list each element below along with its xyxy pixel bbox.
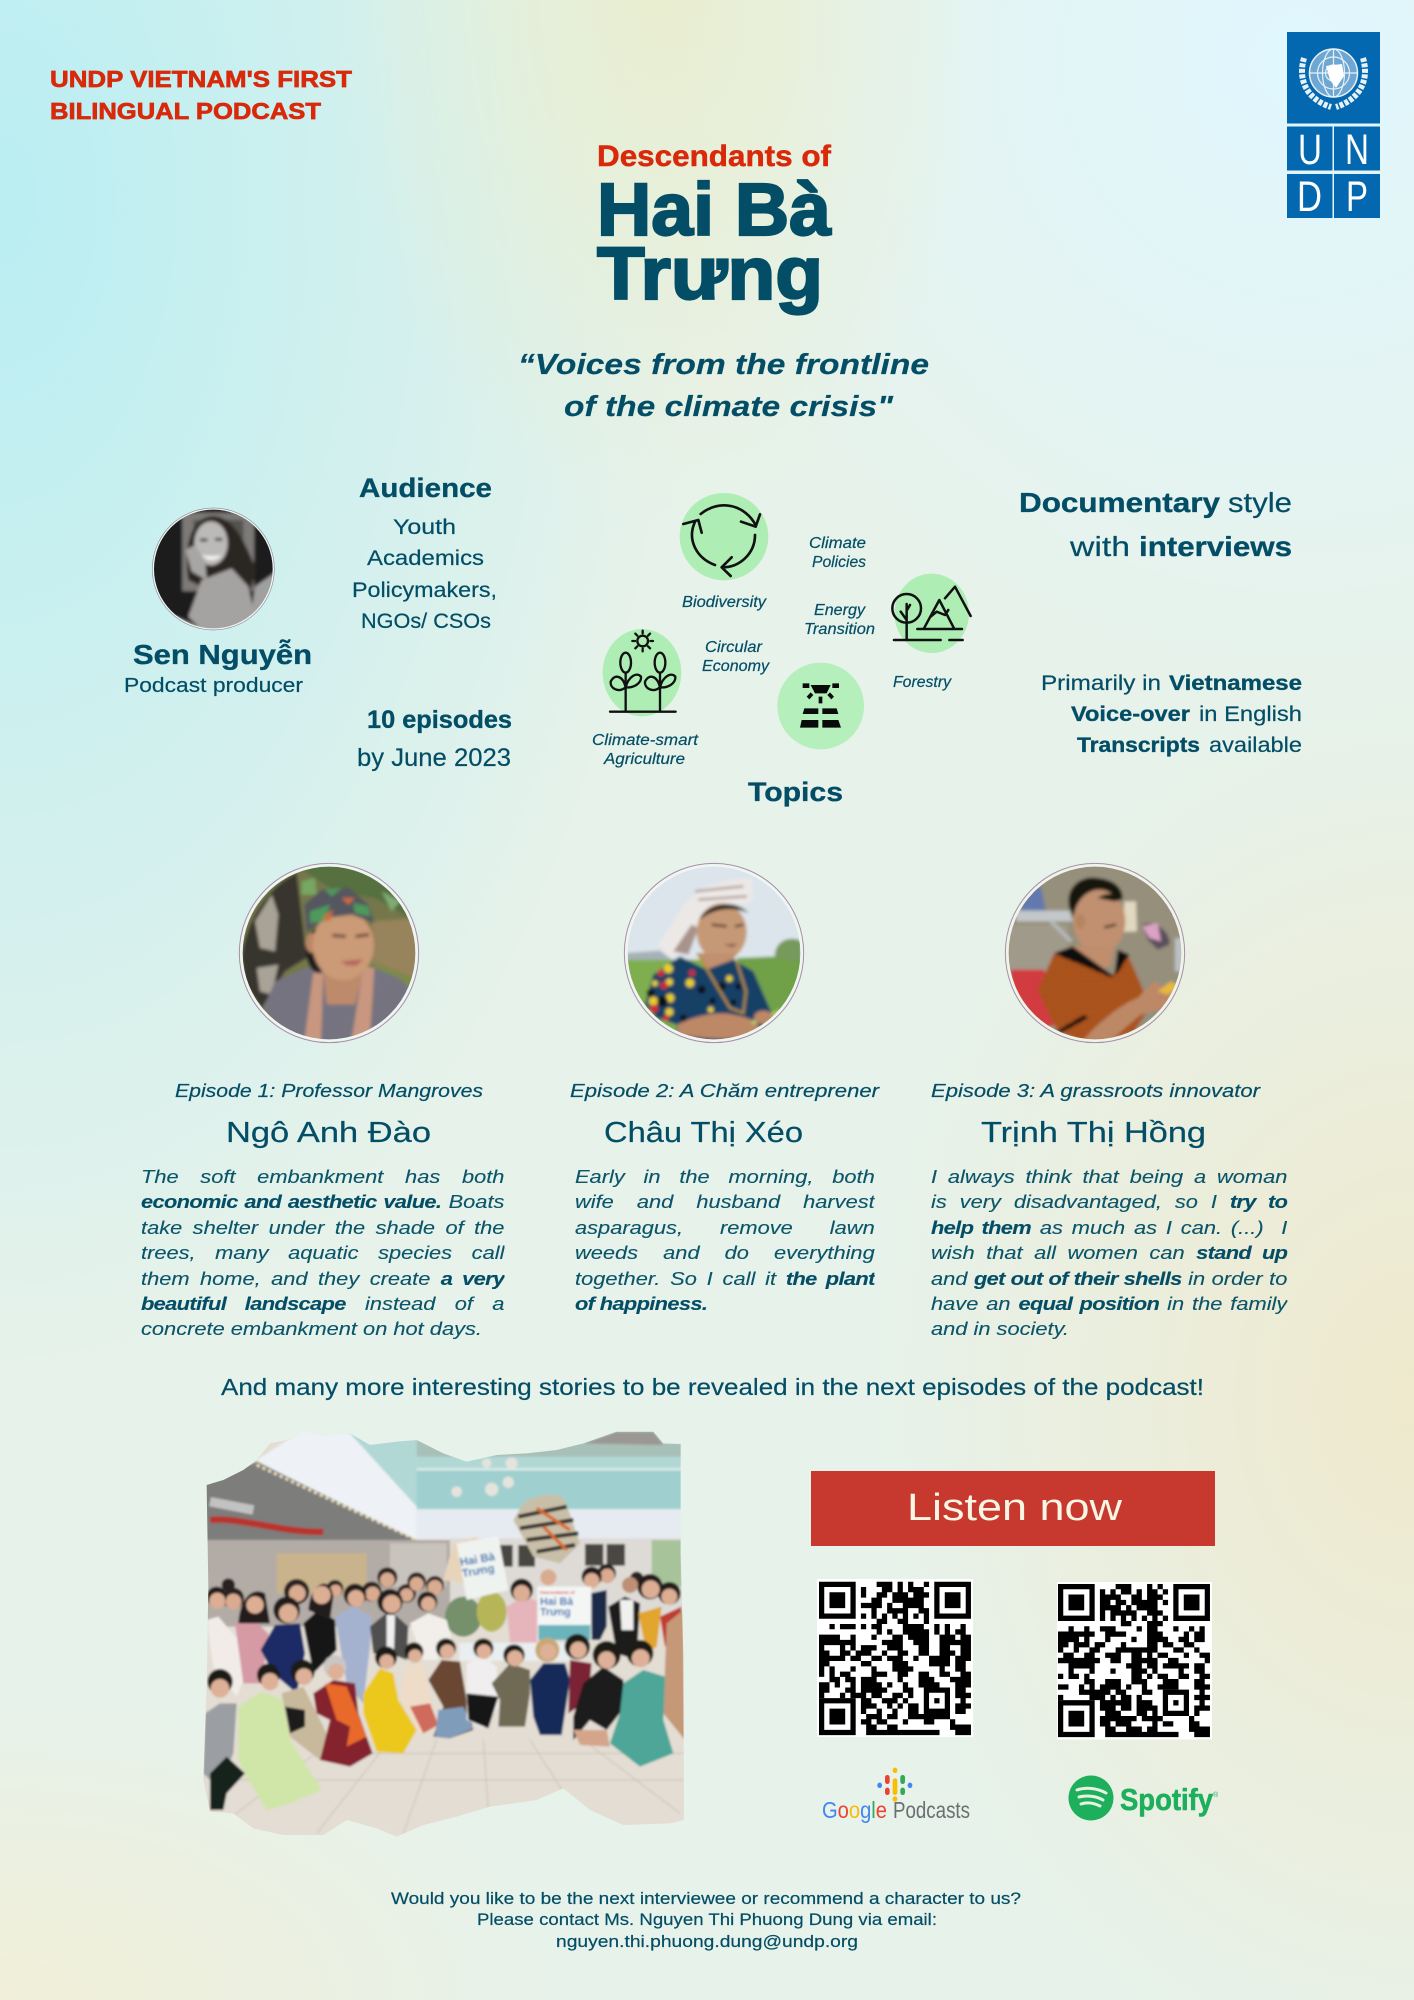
teaser line: And many more interesting stories to be revealed in the next episodes of the podcast!: [221, 1374, 1204, 1400]
posters: Hai Bà: [459, 1551, 497, 1569]
quote: voices from the frontline: “Voices from the frontline: [518, 349, 929, 381]
QR code: Spotify: [1057, 1582, 1212, 1740]
name: Trịnh Thị Hồng: [981, 1117, 1206, 1149]
quote text: weeds and do everything: [575, 1242, 875, 1263]
topic labels: Economy: [702, 658, 770, 675]
language note: available: [1209, 734, 1302, 757]
language note: Vietnamese: [1169, 672, 1302, 695]
quote text: wife and husband harvest: [575, 1191, 875, 1212]
episode label: Episode 2: A Chăm entreprener: [570, 1080, 880, 1101]
logo: Google Podcasts: [822, 1770, 970, 1823]
episode label: Episode 1: Professor Mangroves: [175, 1080, 483, 1101]
language note: in English: [1199, 703, 1302, 726]
format note: documentary style: with: [1069, 531, 1130, 562]
standing row: [207, 1617, 243, 1697]
footer contact: Would you like to be the next interviewee or recommend a character to us?: [391, 1890, 1021, 1908]
logo: UNDP: D: [1297, 173, 1322, 221]
podcast title: Descendants of: [597, 140, 832, 173]
logo: UNDP: N: [1345, 126, 1369, 174]
language note: Voice-over: [1071, 703, 1190, 726]
photo: Sen Nguyen: [152, 508, 275, 630]
tagline: UNDP Vietnam's first bilingual podcast: [50, 66, 352, 124]
episodes count: 10 episodes: [367, 706, 512, 734]
portrait: Ngo Anh Dao: [235, 858, 425, 1048]
icon: climate-smart agriculture plants: [603, 629, 681, 716]
portrait: Chau Thi Xeo: [620, 858, 810, 1048]
portrait: Trinh Thi Hong: [1001, 858, 1191, 1048]
quote text: them home, and they create a very: [141, 1268, 504, 1289]
quote text: concrete embankment on hot days.: [141, 1318, 482, 1339]
topic labels: Forestry: [893, 674, 952, 691]
episode 3 card: [931, 858, 1287, 1344]
language note: [1041, 672, 1302, 757]
group photo with torn edge: Hai Bà: [540, 1596, 573, 1608]
logo: UNDP: U: [1298, 126, 1322, 174]
producer panel: [124, 500, 312, 697]
quote text: take shelter under the shade of the: [141, 1217, 504, 1238]
episode 2 card: [570, 858, 880, 1344]
podcast title: Trưng: [597, 232, 823, 315]
format note: documentary style: Documentary: [1019, 487, 1220, 518]
quote text: The soft embankment has both: [141, 1166, 504, 1187]
topics diagram: [592, 493, 971, 807]
topic labels: Transition: [804, 621, 875, 638]
logo: Spotify: ®: [1213, 1791, 1219, 1799]
topic labels: Policies: [812, 554, 866, 571]
audience block: Academics: [367, 547, 484, 570]
quote text: is very disadvantaged, so I try to: [931, 1191, 1287, 1212]
topic labels: Circular: [705, 639, 763, 656]
podcast title: Hai Bà: [597, 168, 832, 251]
button: listen now: Listen now: [907, 1487, 1123, 1529]
audience block: [352, 473, 497, 633]
topic labels: Agriculture: [603, 751, 685, 768]
quote text: wish that all women can stand up: [931, 1242, 1287, 1263]
format note: documentary style: [1019, 487, 1292, 562]
topic labels: Energy: [814, 602, 866, 619]
quote text: of happiness.: [575, 1293, 707, 1314]
audience block: Policymakers,: [352, 579, 497, 602]
posters: [457, 1536, 508, 1600]
quote text: I always think that being a woman: [931, 1166, 1287, 1187]
group photo with torn edge: Descendants of: [540, 1590, 575, 1595]
quote text: and in society.: [931, 1318, 1069, 1339]
seated row: [203, 1703, 237, 1780]
podcast title: [597, 140, 832, 315]
icon: energy transition solar panels: [777, 663, 864, 749]
logo: UNDP: [1287, 32, 1380, 221]
icon: forestry tree and mountains: [892, 574, 971, 653]
topic labels: Climate-smart: [592, 732, 699, 749]
posters: Trưng: [461, 1563, 496, 1580]
episode 1 card: [141, 858, 504, 1344]
quote text: trees, many aquatic species call: [141, 1242, 504, 1263]
quote text: [141, 1164, 504, 1344]
button: listen now: [811, 1471, 1215, 1546]
name: Ngô Anh Đào: [226, 1117, 431, 1149]
quote text: asparagus, remove lawn: [575, 1217, 875, 1238]
logo: UNDP: P: [1346, 173, 1368, 221]
quote text: help them as much as I can. (...) I: [931, 1217, 1287, 1238]
episodes count: by June 2023: [357, 744, 511, 772]
audience block: Youth: [393, 516, 456, 539]
language note: Transcripts: [1077, 734, 1200, 757]
format note: documentary style: interviews: [1139, 531, 1292, 562]
role: Podcast producer: [124, 675, 303, 697]
heading: topics: Topics: [748, 777, 843, 807]
quote text: [575, 1164, 875, 1344]
quote text: have an equal position in the family: [931, 1293, 1287, 1314]
topic labels: [592, 535, 952, 768]
group photo with torn edge: [200, 1427, 690, 1840]
quote text: beautiful landscape instead of a: [141, 1293, 504, 1314]
name: Châu Thị Xéo: [604, 1117, 803, 1149]
tagline: UNDP Vietnam's first bilingual podcast: UNDP VIETNAM'S FIRST: [50, 66, 352, 92]
footer contact: Please contact Ms. Nguyen Thi Phuong Dung via email:: [477, 1911, 937, 1929]
QR code: Google Podcasts: [817, 1579, 973, 1737]
episode label: Episode 3: A grassroots innovator: [931, 1080, 1261, 1101]
footer contact: [391, 1890, 1021, 1951]
footer contact: nguyen.thi.phuong.dung@undp.org: [556, 1933, 858, 1951]
topic labels: Climate: [809, 535, 866, 552]
topic labels: Biodiversity: [682, 594, 767, 611]
language note: Primarily in: [1041, 672, 1161, 695]
icon: circular economy arrows: [680, 493, 768, 580]
group photo with torn edge: Trưng: [540, 1606, 571, 1618]
tagline: UNDP Vietnam's first bilingual podcast: BILINGUAL PODCAST: [50, 98, 321, 124]
format note: documentary style: style: [1228, 487, 1292, 518]
quote text: [931, 1164, 1287, 1344]
logo: Google Podcasts: Google: [822, 1797, 887, 1823]
logo: Google Podcasts: Podcasts: [893, 1797, 970, 1823]
episodes count: [357, 706, 512, 772]
logo: Spotify: Spotify: [1120, 1782, 1214, 1817]
audience block: NGOs/ CSOs: [361, 610, 491, 633]
quote: voices from the frontline: of the climate crisis": [564, 391, 894, 423]
quote text: economic and aesthetic value. Boats: [141, 1191, 504, 1212]
quote text: Early in the morning, both: [575, 1166, 875, 1187]
quote: voices from the frontline: [518, 349, 929, 423]
quote text: together. So I call it the plant: [575, 1268, 875, 1289]
logo: Spotify: [1068, 1776, 1219, 1820]
audience block: Audience: [359, 473, 492, 503]
quote text: and get out of their shells in order to: [931, 1268, 1287, 1289]
mic balloon: [513, 1495, 580, 1563]
name: Sen Nguyễn: [133, 639, 312, 670]
